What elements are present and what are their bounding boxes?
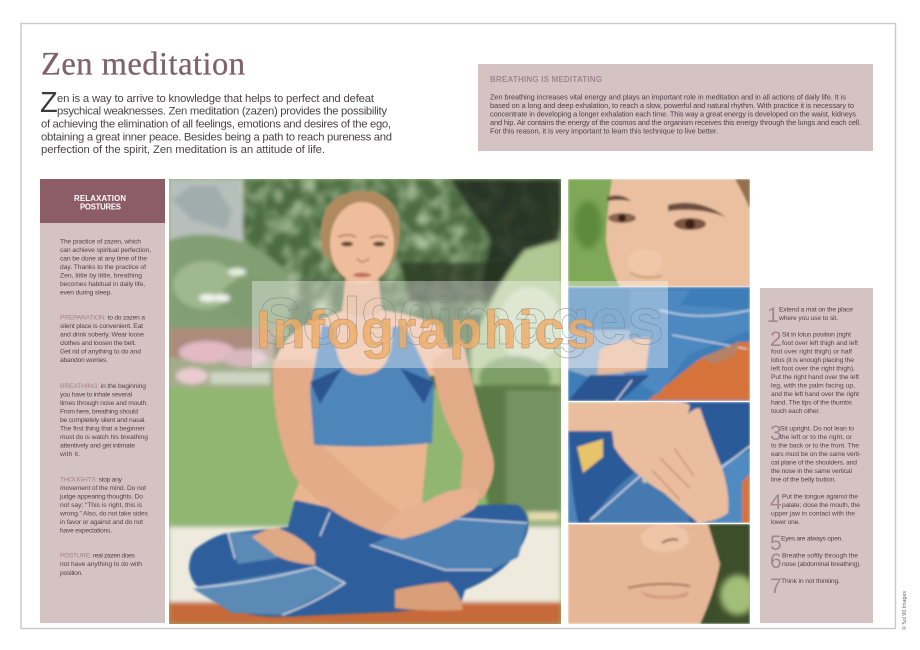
intro paragraph: even during sleep.: [60, 290, 112, 296]
step 6: [770, 550, 861, 573]
watermark: [252, 281, 668, 368]
breathing text: concentrate in developing a longer exhalation each time. This way a great energy is developed on the waist, kidneys: [490, 110, 856, 118]
posture: position.: [60, 570, 83, 577]
step 5: Eyes are always open.: [781, 536, 843, 542]
step 1: 1: [767, 304, 779, 327]
breathing: From here, breathing should: [60, 408, 138, 416]
preparation: and drink soberly. Wear loose: [60, 332, 144, 338]
intro paragraph: The practice of zazen, which: [60, 238, 141, 246]
breathing text: and hip. Air contains the energy of the cosmos and the organism receives this energy through the lungs and each cell.: [490, 118, 861, 127]
thoughts: have expectations.: [60, 528, 112, 534]
step 3: Sit upright. Do not lean to: [780, 426, 854, 432]
preparation: PREPARATION: to do zazen a: [60, 314, 145, 322]
preparation: [60, 314, 145, 364]
posture: not have anything to do with: [60, 561, 142, 568]
breathing: BREATHING: in the beginning: [60, 383, 146, 390]
step 6: nose (abdominal breathing).: [782, 561, 861, 568]
step 1: [767, 304, 853, 327]
breathing: be completely silent and nasal.: [60, 417, 146, 424]
step 2: left foot over the right thigh).: [771, 366, 855, 372]
panel header: RELAXATION: [74, 194, 126, 203]
step 3: cal plane of the shoulders, and: [771, 460, 857, 466]
step 4: lower one.: [771, 519, 800, 526]
posture: [60, 552, 142, 577]
thoughts: not say: “This is right, this is: [60, 502, 143, 509]
intro text block: perfection of the spirit, Zen meditation is an attitude of life.: [41, 144, 325, 156]
step 3: to the back or to the front. The: [771, 442, 859, 450]
panel: steps: [760, 288, 873, 623]
step 3: the nose in the same vertical: [771, 468, 852, 475]
preparation: silent place is convenient. Eat: [60, 323, 143, 330]
intro paragraph: becomes habitual in daily life,: [60, 281, 145, 288]
step 2: and the left hand over the right: [771, 391, 859, 398]
posture: POSTURE: real zazen does: [60, 552, 136, 560]
thoughts: judge appearing thoughts. Do: [59, 494, 143, 500]
left arm: [273, 360, 400, 533]
intro paragraph: can be done at any time of the: [60, 256, 147, 262]
torso: [291, 442, 429, 515]
step 7: Think in not thinking.: [781, 578, 840, 585]
preparation: clothes and loosen the belt.: [60, 340, 136, 347]
breathing heading: BREATHING IS MEDITATING: [490, 75, 602, 84]
step 2: [770, 328, 859, 415]
step 2: touch each other.: [771, 408, 820, 415]
neck and head: [343, 277, 381, 316]
intro paragraph: can achieve spiritual perfection,: [60, 247, 151, 254]
intro text block: en is a way to arrive to knowledge that helps to perfect and defeat: [57, 93, 375, 105]
breathing: times through nose and mouth.: [60, 400, 148, 407]
photo: nose and mouth close-up: [568, 524, 756, 624]
panel: breathing is meditating: [478, 64, 873, 151]
step 2: lotus (it is enough placing the: [771, 357, 854, 364]
shoulders and chest: [272, 308, 450, 378]
intro paragraph: day. Thanks to the practice of: [60, 264, 146, 271]
breathing text: For this reason, it is very important to learn this technique to live better.: [490, 126, 718, 136]
breathing: The first thing that a beginner: [60, 426, 146, 432]
breathing: attentively and get intimate: [60, 442, 135, 450]
step 4: palate; close the mouth, the: [782, 502, 860, 509]
panel: relaxation postures: [40, 179, 165, 623]
step 3: the left or to the right, or: [780, 434, 853, 441]
drop cap Z: Z: [40, 87, 58, 119]
breathing text: Zen breathing increases vital energy and plays an important role in meditation and in all actions of daily life. It is: [490, 92, 846, 102]
thoughts: in favor or against and do not: [60, 519, 143, 526]
breathing: with it.: [59, 451, 80, 458]
hands: [378, 489, 480, 539]
figure: [189, 191, 528, 617]
step 2: foot over right thigh) or half: [771, 348, 852, 356]
watermark orange text: Infographics: [256, 300, 596, 360]
breathing: must do is watch his breathing: [60, 434, 148, 441]
step 4: Put the tongue against the: [782, 494, 858, 500]
step 6: 6: [770, 550, 782, 573]
step 4: 4: [770, 491, 782, 514]
step 3: [770, 422, 861, 484]
step 2: 2: [770, 328, 782, 351]
trousers: [189, 500, 528, 617]
photo: arm and knee close-up: [568, 287, 750, 401]
watermark outline text: Sol90images: [258, 284, 664, 358]
breathing text: based on a long and deep exhalation, to reach a slow, powerful and natural rhythm. With practice it is necessary to: [490, 101, 854, 110]
preparation: abandon worries.: [60, 357, 108, 364]
breathing: [59, 383, 148, 458]
thoughts: THOUGHTS: stop any: [60, 476, 123, 484]
breathing text: [490, 92, 861, 136]
step 1: where you use to sit.: [778, 315, 838, 322]
thoughts: wrong.” Also, do not take sides: [59, 510, 149, 518]
step 1: Extend a mat on the place: [779, 306, 853, 314]
step 5: 5: [770, 532, 782, 555]
intro text block: obtaining a great inner peace. Besides being a path to reach pureness and: [41, 132, 392, 144]
step 6: Breathe softly through the: [782, 552, 858, 560]
title: Zen meditation: [41, 46, 245, 82]
thoughts: [59, 476, 149, 534]
breathing: you have to inhale several: [60, 392, 132, 398]
panel header: [40, 179, 165, 223]
step 7: 7: [770, 575, 782, 598]
thoughts: movement of the mind. Do not: [60, 485, 146, 492]
glass vase: [506, 390, 561, 515]
preparation: Get rid of anything to do and: [60, 348, 141, 356]
photo: woman meditating in lotus position: [169, 179, 562, 624]
intro text block: of achieving the elimination of all feelings, emotions and desires of the ego,: [41, 118, 391, 130]
step 7: [770, 575, 840, 598]
step 2: hand. The tips of the thumbs: [771, 400, 853, 406]
intro paragraph: Zen, little by little, breathing: [60, 272, 142, 280]
step 3: 3: [770, 422, 782, 445]
step 2: leg, with the palm facing up,: [771, 382, 855, 390]
panel header: POSTURES: [80, 202, 121, 212]
step 2: foot over left thigh and left: [782, 340, 858, 347]
intro paragraph: [60, 238, 151, 296]
garden background: [169, 179, 562, 624]
step 3: line of the belly button.: [771, 476, 836, 484]
top: [310, 325, 434, 447]
step 2: Put the right hand over the left: [771, 374, 859, 381]
intro text block: [40, 87, 392, 156]
photo: hands close-up: [568, 401, 750, 523]
step 4: upper jaw in contact with the: [771, 510, 855, 518]
step 3: ears must be on the same verti-: [771, 451, 861, 458]
step 2: Sit in lotus position (right: [782, 332, 851, 338]
step 4: [770, 491, 860, 526]
right arm: [432, 340, 494, 499]
credit: © Sol 90 Images: [901, 591, 908, 630]
step 5: [770, 532, 843, 555]
photo: eyes close-up: [568, 179, 750, 287]
intro text block: psychical weaknesses. Zen meditation (zazen) provides the possibility: [57, 106, 387, 118]
feet: [252, 528, 315, 565]
